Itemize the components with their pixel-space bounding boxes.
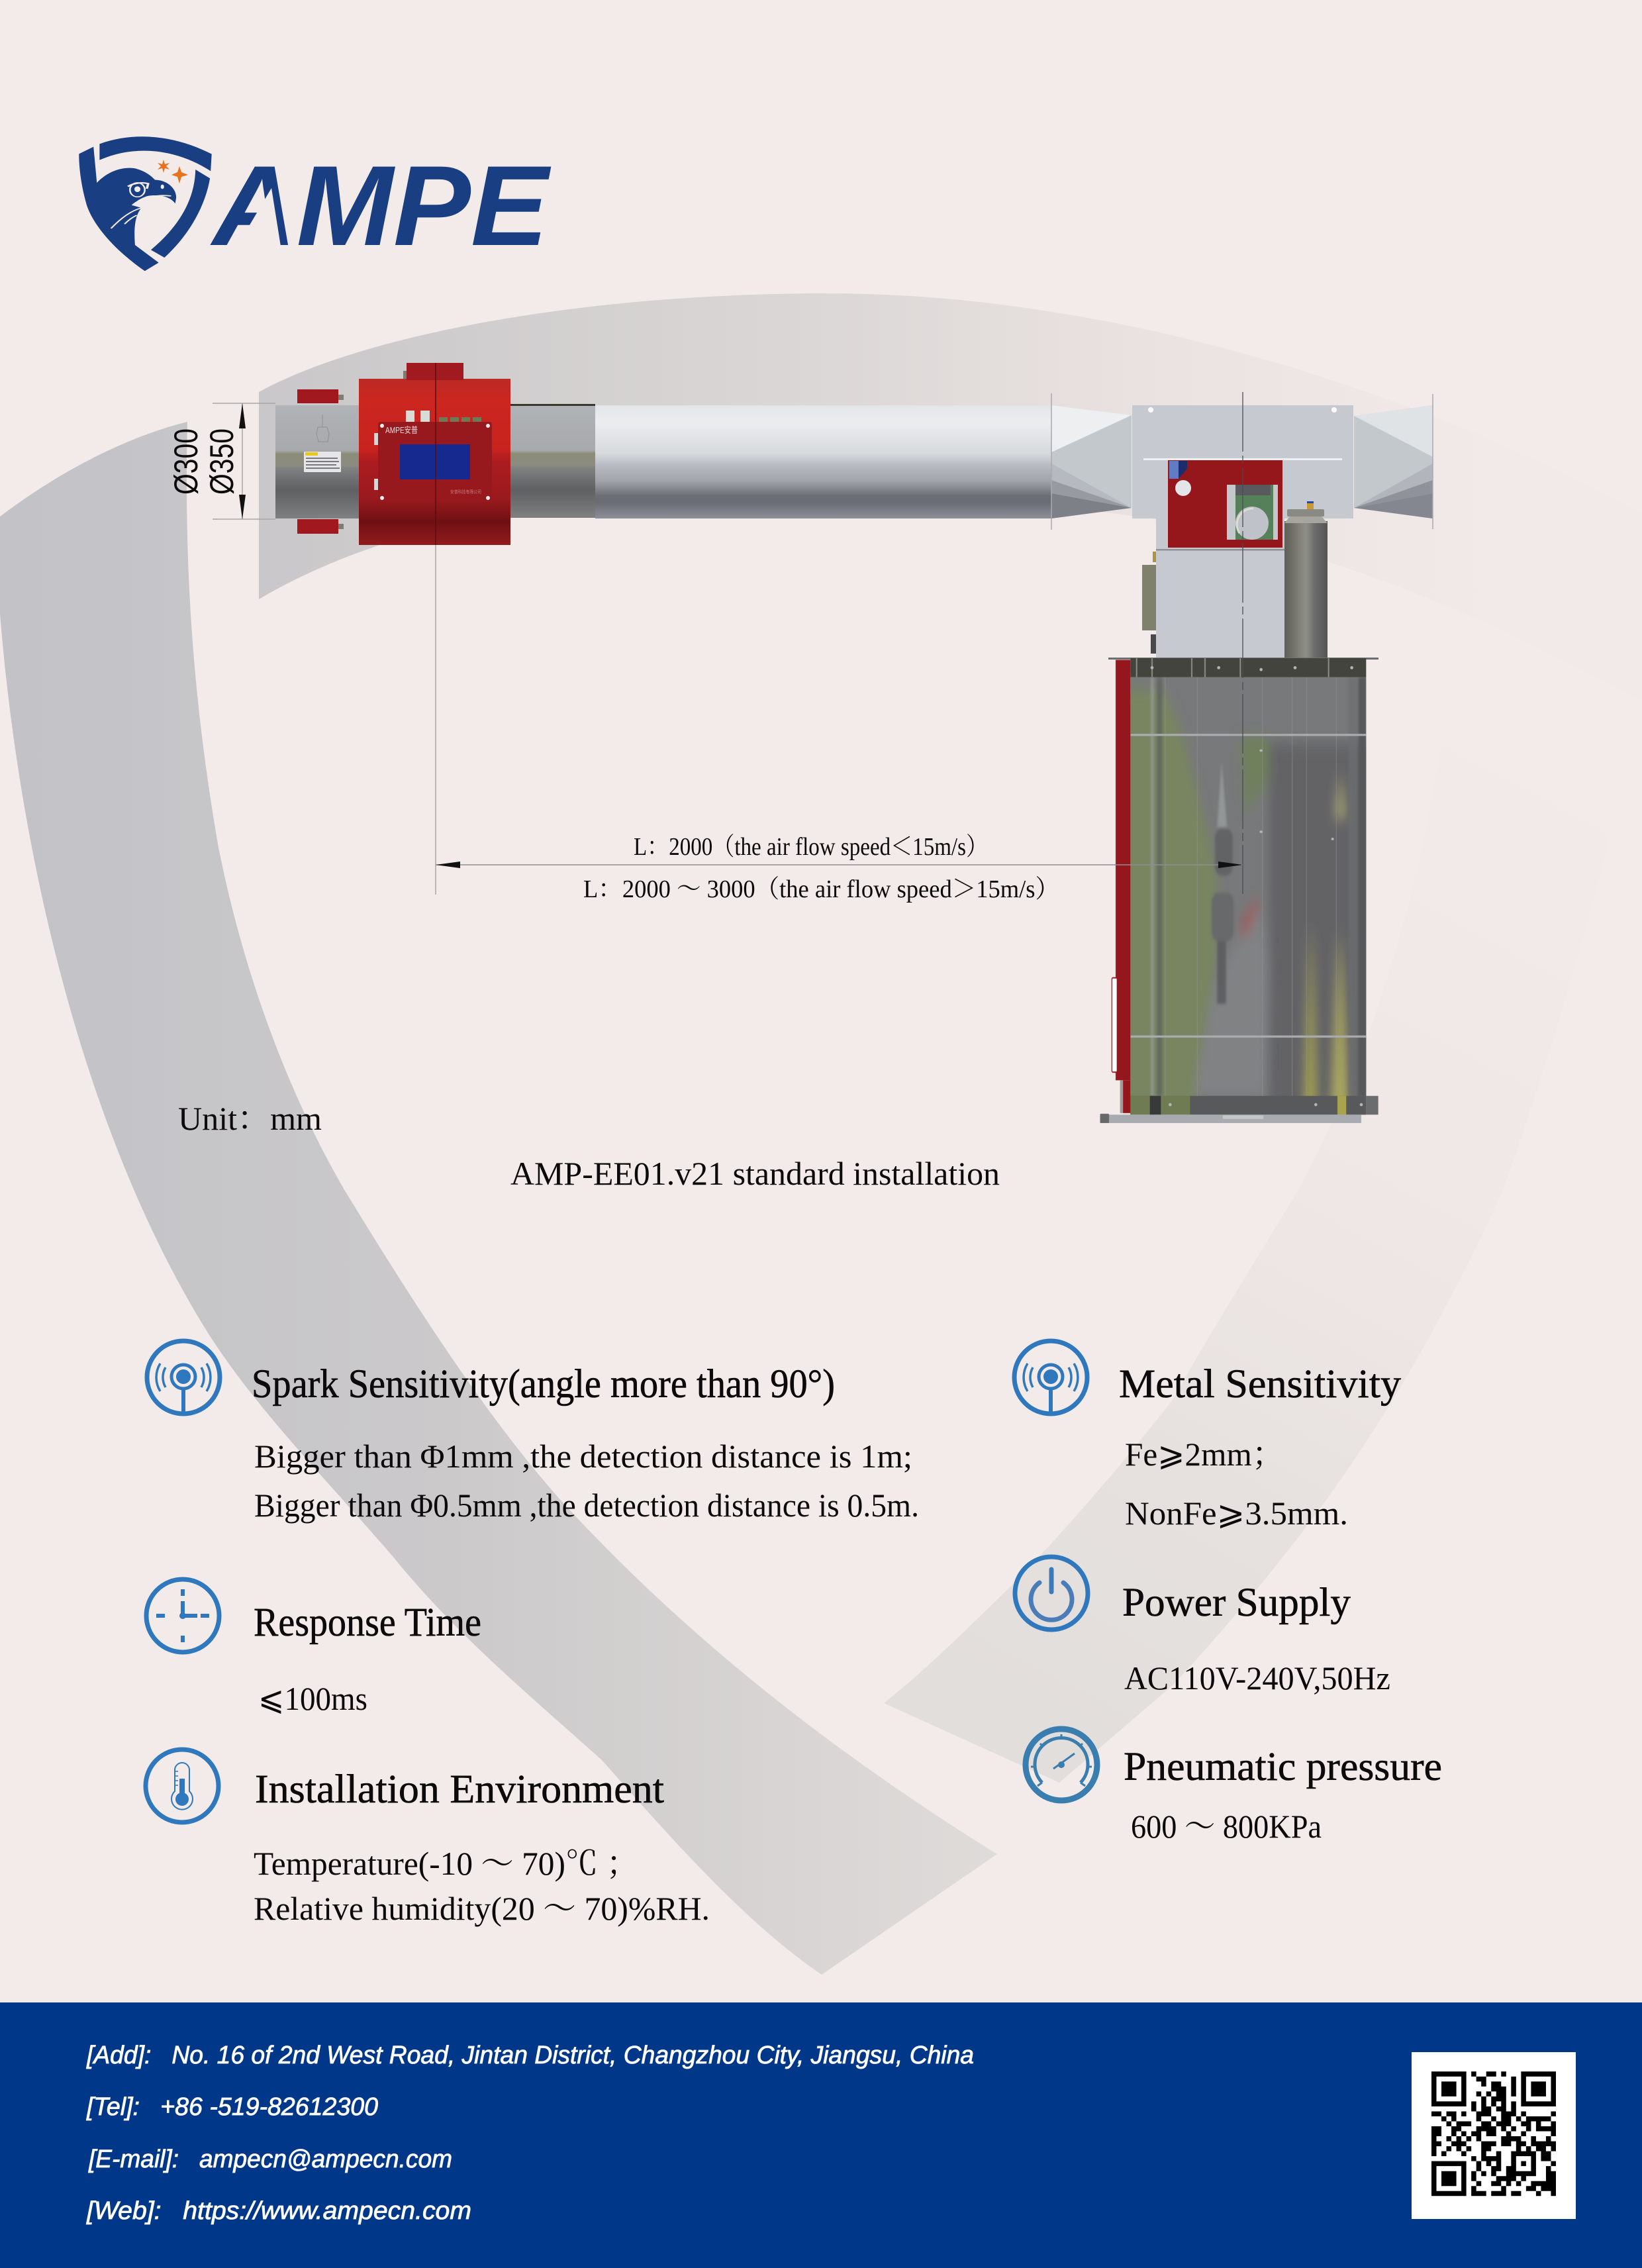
- heading: Power Supply: [1122, 1581, 1351, 1625]
- red housing: [359, 363, 510, 545]
- gas bottle large: [1284, 501, 1328, 658]
- text: temperature: Temperature(-10 ～ 70)℃ ；: [254, 1845, 639, 1882]
- main cylinder: [1100, 658, 1384, 1124]
- contact: telephone: [Tel]: +86 -519-82612300: [86, 2093, 378, 2121]
- label: length high speed: L：2000 ～ 3000（the air flow speed＞15m/s）: [583, 875, 1059, 903]
- top red box: [407, 363, 463, 380]
- red side strip: [1112, 660, 1130, 1113]
- contact: website: [Web]: https://www.ampecn.com: [86, 2197, 471, 2225]
- icon: shield and eagle: [79, 136, 212, 271]
- diagram: detection system side view: [275, 363, 1433, 1124]
- panel company text: 安普科技有限公司: [450, 489, 481, 495]
- control panel: [378, 422, 492, 502]
- icon: metal sensor: [1014, 1341, 1087, 1414]
- panel: power supply: [1015, 1557, 1390, 1697]
- cable glands: [406, 411, 430, 422]
- right cone: [1354, 394, 1433, 529]
- panel: installation environment: [146, 1750, 710, 1927]
- heading: Pneumatic pressure: [1124, 1745, 1442, 1789]
- background shield shape: [0, 293, 1642, 1975]
- text: 600 ～ 800KPa: [1131, 1808, 1322, 1845]
- icon: power: [1015, 1557, 1088, 1630]
- text: ferrous: Fe⩾2mm；: [1125, 1436, 1284, 1473]
- left cone: [1051, 393, 1132, 530]
- text: line one: Bigger than Φ1mm ,the detection distance is 1m;: [254, 1438, 912, 1475]
- icon: thermometer: [146, 1750, 218, 1822]
- text: line two: Bigger than Φ0.5mm ,the detection distance is 0.5m.: [254, 1487, 919, 1524]
- sensor top: [297, 389, 338, 403]
- heading: Metal Sensitivity: [1119, 1362, 1402, 1406]
- heading: Response Time: [254, 1601, 481, 1645]
- label: length low speed: L：2000（the air flow speed＜15m/s）: [634, 833, 988, 861]
- icon: spark sensor: [147, 1341, 220, 1414]
- logo: AMPE: [79, 136, 551, 271]
- main tube: [595, 405, 1051, 518]
- left pipe: [275, 405, 359, 518]
- label: diameter 350: Ø350: [203, 428, 240, 495]
- text: ⩽100ms: [258, 1680, 367, 1717]
- text: AC110V-240V,50Hz: [1124, 1659, 1390, 1697]
- heading: Installation Environment: [255, 1767, 664, 1812]
- panel: metal sensitivity: [1014, 1341, 1402, 1532]
- panel: pneumatic pressure: [1026, 1729, 1442, 1845]
- middle pipe: [510, 404, 595, 518]
- green valve unit: [1227, 485, 1278, 540]
- heading: Spark Sensitivity(angle more than 90°): [252, 1362, 835, 1406]
- diagram caption: AMP-EE01.v21 standard installation: [510, 1155, 1000, 1192]
- label: diameter 300: Ø300: [168, 428, 205, 495]
- warning label: [304, 452, 341, 472]
- icon: clock: [146, 1579, 219, 1652]
- unit note: Unit：mm: [178, 1100, 322, 1137]
- icon: outline on left pipe: [316, 415, 329, 442]
- panel: response time: [146, 1579, 481, 1717]
- icon: orange stars: [158, 160, 188, 183]
- footer band: [0, 2002, 1642, 2268]
- logo wordmark: AMPE: [210, 142, 551, 270]
- QR code: [1412, 2052, 1576, 2219]
- junction box: [1132, 405, 1353, 658]
- flange plate: [1108, 658, 1378, 660]
- dimension: installation length: [436, 392, 1243, 903]
- contact: address: [Add]: No. 16 of 2nd West Road, Jintan District, Changzhou City, Jiangsu, China: [86, 2042, 974, 2069]
- red valve panel: [1168, 460, 1282, 548]
- dimension: pipe diameter: [168, 403, 275, 519]
- screen: [400, 444, 470, 479]
- side box: [1151, 634, 1156, 654]
- contact: email: [E-mail]: ampecn@ampecn.com: [88, 2145, 452, 2173]
- housing centre line: [435, 363, 436, 545]
- logo letter A opening: [237, 188, 281, 246]
- panel logo: AMPE安普: [385, 425, 418, 435]
- base plate: [1100, 1096, 1378, 1123]
- sensor connectors: [338, 371, 407, 529]
- panel: spark sensitivity: [147, 1341, 919, 1524]
- text: humidity: Relative humidity(20 ～ 70)%RH.: [254, 1890, 710, 1927]
- icon: gauge: [1026, 1729, 1097, 1800]
- panel screws and latches: [374, 433, 378, 490]
- gas bottle small: [1142, 552, 1156, 630]
- pressure gauge: [1175, 480, 1191, 496]
- blue bracket: [1169, 461, 1179, 479]
- sensor bottom: [297, 519, 338, 534]
- text: non-ferrous: NonFe⩾3.5mm.: [1125, 1495, 1348, 1532]
